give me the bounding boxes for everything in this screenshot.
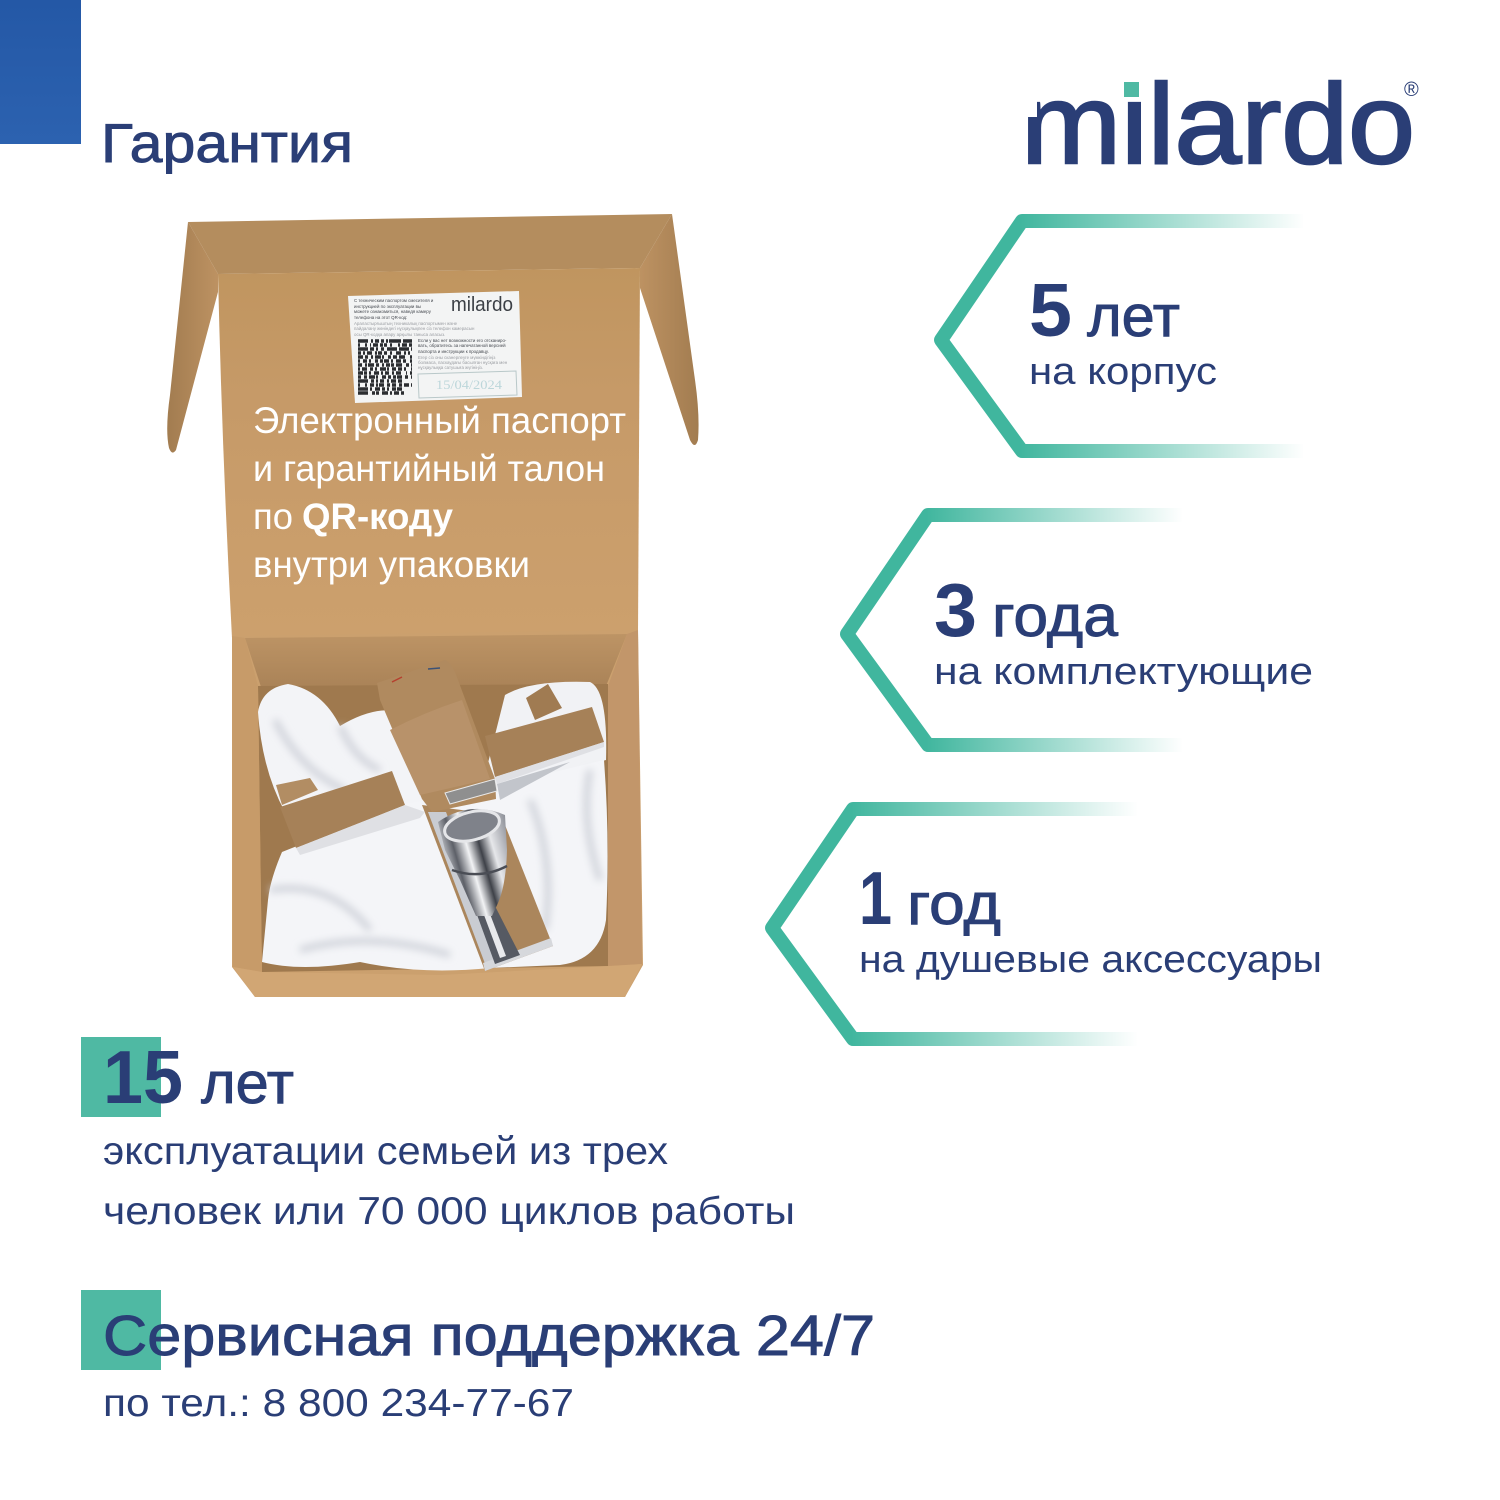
faucet lower spout — [476, 908, 520, 964]
number: 5 — [1029, 268, 1072, 352]
faucet cartridge cap — [441, 806, 503, 846]
faucet chrome body — [438, 809, 507, 916]
label small print: осы QR-кодқа апару арқылы таныса аласыз. — [354, 332, 445, 337]
description: на корпус — [1029, 351, 1217, 393]
faucet right arm edge — [495, 742, 604, 784]
teal accent square — [81, 1037, 161, 1117]
number: 3 — [934, 568, 977, 652]
handle fold shade — [390, 700, 490, 795]
box caption: по — [253, 496, 293, 537]
label small print: нұсқаулыққа сатушыға жүгініңіз. — [418, 365, 483, 370]
box caption: внутри упаковки — [253, 544, 530, 585]
faucet spout highlight — [484, 914, 506, 958]
faucet handle — [377, 660, 496, 812]
block: 15 years of service — [81, 1035, 795, 1233]
label small print: пайдалану жөніндегі нұсқаулықпен сіз телефон камерасын — [354, 326, 475, 331]
box caption: QR-коду — [302, 496, 453, 537]
back wall of the box — [245, 634, 627, 690]
block: service support — [81, 1290, 875, 1425]
chevron card: 1 year — [772, 809, 1322, 1039]
number: 15 — [103, 1035, 183, 1119]
hot indicator — [392, 677, 402, 682]
right flap — [640, 214, 699, 445]
chevron card: 3 years — [847, 515, 1313, 745]
logo accent dot — [1124, 82, 1139, 97]
QR code — [358, 341, 412, 393]
faucet left arm — [280, 771, 405, 848]
cloth folds — [270, 720, 600, 955]
left inner wall — [232, 636, 262, 972]
box base outer — [232, 630, 643, 997]
blue corner block — [0, 0, 81, 144]
label small print: паспорта и инструкции к продавцу. — [418, 349, 489, 354]
cold indicator — [428, 668, 440, 669]
heading: Сервисная поддержка 24/7 — [103, 1304, 875, 1368]
description: на комплектующие — [934, 651, 1313, 693]
faucet tip edge — [483, 938, 553, 971]
label small print: Егер сіз оны сканерлеуге мүмкіндігіңіз — [418, 355, 495, 360]
label small print: можете ознакомиться, наведя камеру — [354, 309, 432, 314]
label small print: Араластырғыштың техникалық паспортымен және — [354, 321, 458, 326]
logo mask over the i dot — [1118, 68, 1144, 99]
label small print: вать, обратитесь за напечатанной версией — [418, 343, 506, 348]
body ring — [452, 866, 507, 874]
chevron frame — [847, 515, 1183, 745]
right inner wall — [608, 630, 642, 966]
label small print — [354, 298, 508, 370]
unit: год — [907, 872, 1001, 937]
logo: milardo: milardo — [1021, 61, 1415, 187]
description: эксплуатации семьей из трех — [103, 1130, 669, 1173]
QR label sticker — [348, 291, 522, 403]
unit: лет — [201, 1051, 294, 1116]
faucet left stub — [276, 778, 318, 805]
front flap edge — [233, 964, 642, 997]
chevron frame — [772, 809, 1138, 1039]
sticker barcode — [445, 779, 497, 804]
label small print: Если у вас нет возможности его отсканиро- — [418, 338, 507, 343]
description: на душевые аксессуары — [859, 939, 1322, 981]
faucet right arm — [485, 707, 604, 777]
lid inner top band — [188, 214, 672, 274]
teal accent square — [81, 1290, 161, 1370]
photo: open cardboard box with faucet — [167, 214, 699, 997]
unit: лет — [1087, 284, 1180, 349]
date stamp box: 15/04/2024 — [436, 377, 503, 392]
faucet connector — [526, 684, 562, 720]
faucet left chrome strip — [428, 812, 502, 969]
label small print: инструкцией по эксплуатации вы — [354, 304, 421, 309]
faucet — [276, 660, 604, 971]
faucet right chrome shadow — [497, 762, 570, 800]
box caption — [253, 400, 626, 585]
box caption: Электронный паспорт — [253, 400, 626, 441]
left flap — [167, 222, 218, 453]
box interior — [258, 684, 608, 972]
chevron card: 5 years — [941, 221, 1303, 451]
faucet lower slab — [422, 805, 553, 971]
title: Гарантия — [101, 112, 353, 174]
number: 1 — [859, 856, 892, 940]
label small print: болмаса, паскаудағы басылған нұсқаға мен — [418, 360, 508, 365]
label logo: milardo — [451, 294, 513, 316]
box caption: и гарантийный талон — [253, 448, 605, 489]
label small print: телефона на этот QR-код: — [354, 315, 407, 320]
registered mark: ® — [1404, 79, 1419, 101]
white cloth — [258, 682, 608, 970]
chevron frame — [941, 221, 1303, 451]
faucet left arm edge — [296, 805, 425, 855]
date stamp box — [418, 371, 517, 398]
label small print: С техническим паспортом смесителя и — [354, 298, 434, 303]
logo mask over the m corner — [1018, 94, 1037, 117]
description line two: человек или 70 000 циклов работы — [103, 1190, 795, 1233]
lid panel — [218, 268, 640, 638]
phone: по тел.: 8 800 234-77-67 — [103, 1382, 574, 1425]
unit: года — [992, 584, 1119, 649]
